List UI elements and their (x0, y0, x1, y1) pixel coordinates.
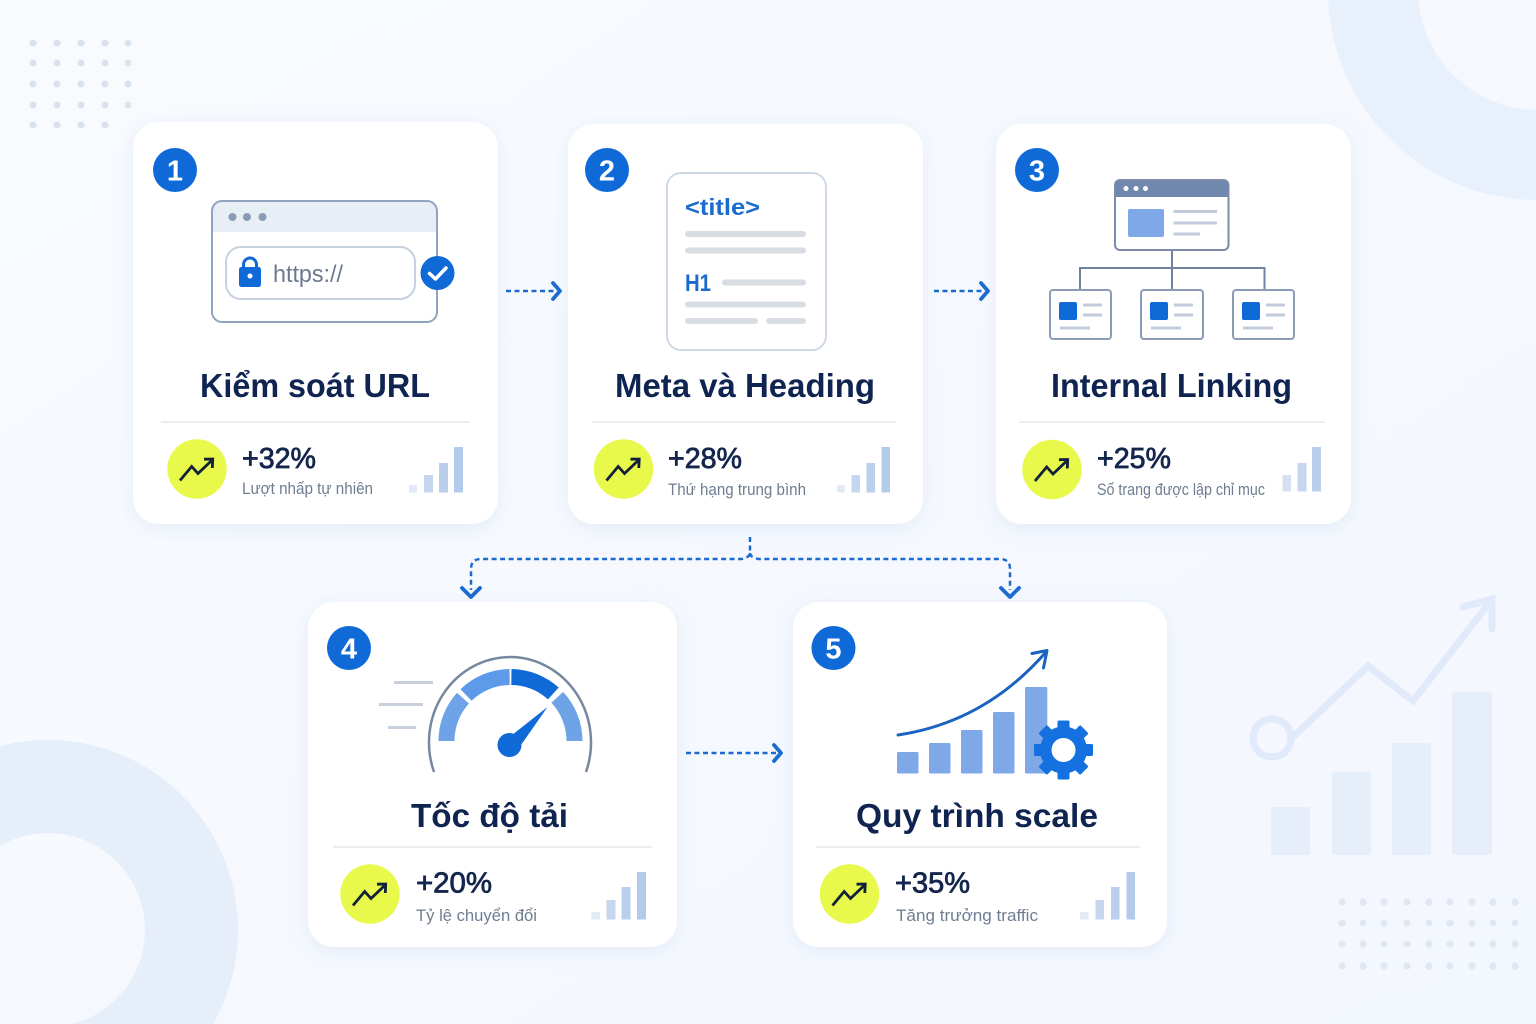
stat: +20%: +20% (416, 868, 492, 900)
heading: Quy trình scale: Quy trình scale (856, 797, 1098, 834)
step badge 1: 1 (167, 156, 183, 188)
icon: trend up (340, 864, 400, 924)
stat: +32%: +32% (242, 443, 316, 475)
arrow: card 1 to card 2 (506, 283, 560, 299)
decorative ring: bottom left (0, 740, 238, 1024)
mini bar chart (1282, 447, 1321, 492)
background chart: bars and rising line (1253, 599, 1492, 855)
arrow: branching connector to cards 4 and 5 (462, 537, 1019, 597)
dot grid: bottom right (1338, 898, 1518, 970)
heading: Meta và Heading: Meta và Heading (615, 367, 875, 404)
mini bar chart (592, 872, 646, 920)
label: Lượt nhấp tự nhiên: Lượt nhấp tự nhiên (242, 480, 373, 498)
stat: +28%: +28% (668, 443, 742, 475)
heading: Internal Linking: Internal Linking (1051, 367, 1292, 404)
mini bar chart (409, 447, 463, 492)
step badge 4: 4 (341, 634, 357, 666)
mini bar chart (837, 447, 890, 492)
stat: +25%: +25% (1097, 443, 1171, 475)
step badge 3 (1015, 148, 1059, 192)
step badge 3: 3 (1029, 156, 1045, 188)
icon: document with title and H1 (667, 173, 826, 350)
panel: card 4 Tốc độ tải (308, 602, 677, 947)
icon: growth chart with gear (897, 650, 1093, 780)
icon: site structure diagram (1050, 180, 1294, 339)
icon: browser with https URL (212, 201, 454, 322)
step badge 2 (585, 148, 629, 192)
step badge 5 (812, 626, 856, 670)
arrow: card 2 to card 3 (934, 283, 988, 299)
panel: card 2 Meta và Heading (568, 124, 923, 524)
label: Số trang được lập chỉ mục: Số trang được lập chỉ mục (1097, 481, 1265, 499)
icon: trend up (820, 864, 879, 924)
heading: Tốc độ tải: Tốc độ tải (411, 797, 568, 834)
stat: +35%: +35% (895, 868, 970, 900)
icon: document with title and H1: H1 (685, 270, 711, 297)
icon: trend up (1022, 440, 1082, 499)
icon: document with title and H1: <title> (685, 194, 760, 220)
label: Tăng trưởng traffic: Tăng trưởng traffic (896, 907, 1038, 925)
mini bar chart (1080, 872, 1135, 920)
label: Thứ hạng trung bình: Thứ hạng trung bình (668, 481, 806, 499)
icon: speedometer gauge (379, 657, 591, 772)
icon: trend up (167, 439, 227, 499)
panel: card 3 Internal Linking (996, 124, 1351, 524)
step badge 1 (153, 148, 197, 192)
step badge 4 (327, 626, 371, 670)
panel: card 1 Kiểm soát URL (133, 122, 498, 524)
arrow: card 4 to card 5 (686, 745, 781, 761)
icon: browser with https URL: https:// (273, 261, 343, 288)
dot grid: top left (30, 40, 132, 128)
panel: card 5 Quy trình scale (793, 602, 1167, 947)
label: Tỷ lệ chuyển đổi: Tỷ lệ chuyển đổi (416, 907, 537, 925)
decorative ring: top right (1328, 0, 1536, 200)
step badge 5: 5 (825, 634, 842, 666)
heading: Kiểm soát URL: Kiểm soát URL (200, 367, 430, 404)
icon: trend up (594, 439, 653, 499)
step badge 2: 2 (599, 156, 615, 188)
